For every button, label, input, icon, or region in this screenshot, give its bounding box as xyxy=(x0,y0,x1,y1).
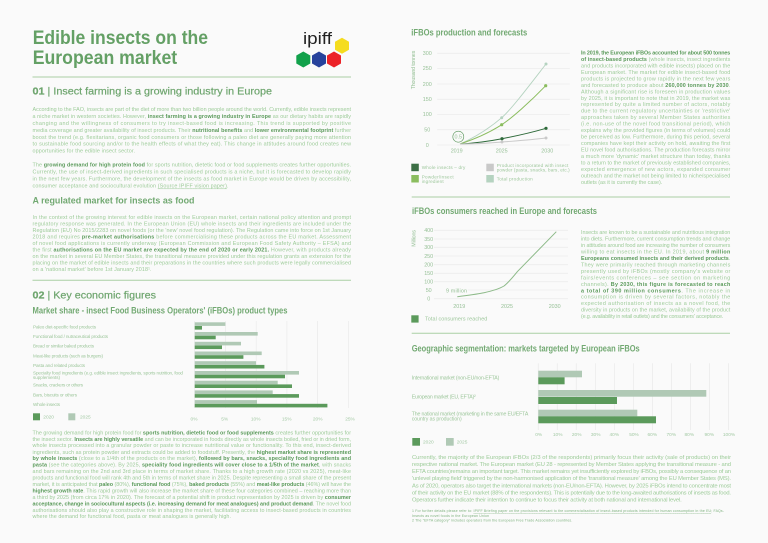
text block: product analysis: The growing demand for high protein food for sports nutrition, dietetic food or food supplements creates further opportunities for xyxy=(32,430,351,436)
text block: product analysis: by whole insects (close to a 1/4th of the products on the market), followed by bars, snacks, speciality food ingredients and xyxy=(32,456,351,462)
line chart: consumers reached: 300 xyxy=(424,245,433,251)
title: Edible insects on the xyxy=(33,28,208,49)
bar chart: product types: 5% xyxy=(221,417,229,423)
bar chart: geographic segmentation: 20% xyxy=(572,432,582,438)
text block: product analysis: authorisations should also play a constructive role in shaping the market, facilitating access to insect-based products in countries xyxy=(32,508,351,514)
text block: consumers analysis: a total of 390 million consumers. The increase in xyxy=(581,288,730,294)
line chart: production forecasts: 100 xyxy=(423,112,432,118)
text block: production analysis: outlets (as it is currently the case). xyxy=(581,180,662,186)
bar chart: geographic segmentation: 50% xyxy=(629,432,640,438)
text block: intro: a niche market in western societies. However, insect farming is a growing industry in Europe as our dietary habits are rapidly xyxy=(32,114,351,120)
line chart: consumers reached: 9 million xyxy=(446,288,467,294)
bar chart: geographic segmentation: 40% xyxy=(609,432,620,438)
text block: consumers analysis: into diets. Furthermore, current consumption trends and change xyxy=(581,237,730,243)
legend: consumers reached: Total consumers reached xyxy=(425,316,487,322)
text block: intro: changing and the willingness of consumers to try insect-based food is increasing. This trend is supported by positive xyxy=(32,121,351,127)
text block: protein demand: Currently, the use of insect-derived ingredients in such specialised products is a niche, but it is forecasted to develop rapidly xyxy=(32,170,351,176)
bar chart: product types: Whole insects xyxy=(33,402,61,407)
text block: regulation: placing on the market of edible insects and their preparations in the countries where such products were legally commercialised xyxy=(32,260,351,266)
line chart: consumers reached: 0 xyxy=(427,297,430,303)
bar chart: geographic segmentation: 100% xyxy=(723,432,736,438)
line chart: production forecasts: 0 xyxy=(426,143,429,149)
text block: protein demand: in the next few years. Furthermore, the development of the insects as food market in Europe would be driven by accessibility, xyxy=(32,177,352,183)
text block: production analysis: represented by quite a limited number of actors, notably xyxy=(581,102,731,108)
line chart: production forecasts: 0.5 xyxy=(455,135,462,141)
bar chart: product types: Pasta and related products xyxy=(33,363,86,368)
bar chart: product types: supplements) xyxy=(33,375,60,380)
text block: geographic analysis xyxy=(412,455,731,504)
text block: production analysis: approaches taken by several Member States authorities xyxy=(581,115,731,121)
text block: production analysis: companies have kept their activity on hold, awaiting the first xyxy=(581,141,731,147)
bar chart: geographic segmentation: 70% xyxy=(666,432,677,438)
line chart: consumers reached xyxy=(412,228,568,310)
bar chart: geographic segmentation: country as production) xyxy=(412,417,462,423)
bar chart: product types: Bread or similar baked products xyxy=(33,344,95,349)
text block: consumers analysis: consumption is driven by several factors, notably the xyxy=(581,295,730,301)
text block: protein demand: consumer acceptance and sociocultural evolution (Source IPIFF vision paper). xyxy=(32,184,228,190)
legend: product types: 2025 xyxy=(80,415,91,421)
text block: product analysis: market, it is anticipated that paleo (80%), functional food (75%), baked products (55%) and meat-like products (46%) will have the xyxy=(32,482,351,488)
text block: production analysis: by 2025, it is important to note that in 2019, the market was xyxy=(581,96,731,102)
bar chart: product types: Snacks, crackers or others xyxy=(33,383,84,388)
text block: intro: media coverage and greater availability of insect products. Their nutritional benefits and lower environmental footprint further xyxy=(32,128,351,134)
text block: geographic analysis: Operators further indicate their intention to continue to focus their activity at both national and international level. xyxy=(412,498,682,504)
line chart: consumers reached: 400 xyxy=(424,228,433,234)
line chart: consumers reached: 2025 xyxy=(501,304,513,310)
legend: geographic segmentation: 2025 xyxy=(457,440,468,446)
heading: market share: Market share - insect Food Business Operators' (iFBOs) product types xyxy=(32,305,288,315)
bar chart: geographic segmentation: 60% xyxy=(647,432,658,438)
logo: ipiff xyxy=(296,29,349,68)
footnotes xyxy=(412,509,725,522)
text block: product analysis xyxy=(32,430,352,520)
text block: product analysis: products and functional food will rank 4th and 5th in terms of market share in 2025. Despite representing a small share of the present xyxy=(32,476,352,482)
text block: regulation: 2018 and requires pre-market authorisations before commercialising these products across the EU market. Assessment xyxy=(32,234,351,240)
text block: regulation: of novel food applications is currently underway (European Commission and European Food Safety Authority – EFSA) and xyxy=(32,241,351,247)
text block: production analysis: to a return to the market of previously established companies, xyxy=(581,160,731,166)
text block: production analysis: of insect-based products (whole insects, insect ingredients xyxy=(581,57,731,63)
text block: product analysis: where the demand for functional food, pasta or meat analogues is generally high. xyxy=(32,514,231,520)
text block: production analysis: explains why the provided figures (in terms of volumes) could xyxy=(581,128,730,134)
text block: production analysis: outreach and the market not being limited to niche/specialised xyxy=(581,173,730,179)
line chart: production forecasts: Thousand tonnes xyxy=(411,50,417,89)
heading: section 01: 01 | Insect farming is a growing industry in Europe xyxy=(32,86,272,98)
footnotes: 1 For further details please refer to: IPIFF Briefing paper on the provisions relevant to the commercialisation of insect-based products intended for human consumption in the EU; FAQs- xyxy=(412,509,725,513)
legend: production forecasts: powder (pasta, snacks, bars, etc.) xyxy=(497,168,570,173)
text block: production analysis: EU novel food authorisations. The production forecasts mirror xyxy=(581,148,731,154)
text block: production analysis: expected emergence of new actors, expanded consumer xyxy=(581,167,731,173)
text block: production analysis: due to the current regulatory uncertainties or 'restrictive' xyxy=(581,109,730,115)
text block: product analysis: acceptance, change in sociocultural aspects (i.e. increasing demand for meat analogues) and product demand. The novel food xyxy=(32,502,351,508)
title: European market xyxy=(33,48,178,69)
legend: production forecasts: Product incorporated with insect xyxy=(497,163,569,168)
text block: production analysis: (i.e. non-use of the novel food transitional period), which xyxy=(581,122,730,128)
text block: geographic analysis: of their activity on the EU market (88% of the respondents). This is potentially due to the long-awaited authorisations of insects as food. xyxy=(412,491,731,497)
legend: production forecasts: ingredient xyxy=(422,179,444,184)
line chart: production forecasts: 2025 xyxy=(496,149,508,155)
text block: consumers analysis: (e.g. availability in retail outlets) and the consumers' acceptance. xyxy=(581,314,723,320)
footnotes: Insects as novel foods in the European Union xyxy=(412,514,489,518)
text block: product analysis: the insect sector. Insects are highly versatile and can be incorporated in foods directly as whole insects boiled, fried or in dried form, xyxy=(32,437,352,443)
text block: consumers analysis xyxy=(580,230,731,320)
text block: regulation: the first authorisations on the EU market are expected by the end of 2020 or early 2021. However, with products already xyxy=(32,247,351,253)
legend: production forecasts: Total production xyxy=(497,177,533,182)
line chart: production forecasts: 150 xyxy=(423,97,432,103)
bar chart: product types: Meat-like products (such as burgers) xyxy=(33,353,103,358)
text block: intro: According to the FAO, insects are part of the diet of more than two billion people around the world. Currently, edible insects represent xyxy=(32,107,352,113)
line chart: consumers reached: 150 xyxy=(424,271,433,277)
line chart: consumers reached: 2019 xyxy=(453,304,465,310)
text block: regulation: Regulation (EU) No 2015/2283 on novel foods (or the 'new' novel food regulation). The Regulation came into force on 1st January xyxy=(32,228,351,234)
text block: intro: opportunities for the edible insect sector. xyxy=(32,149,135,155)
heading: regulated market: A regulated market for insects as food xyxy=(32,196,194,206)
line chart: production forecasts: 200 xyxy=(423,82,432,88)
text block: consumers analysis: in attitudes around food are increasing the number of consumers xyxy=(581,243,731,249)
line chart: production forecasts xyxy=(411,50,570,155)
bar chart: product types: Functional food / nutraceutical products xyxy=(33,334,109,339)
logo: ipiff: ipiff xyxy=(303,29,332,48)
bar chart: geographic segmentation: 30% xyxy=(591,432,601,438)
bar chart: geographic segmentation: 0% xyxy=(535,432,543,438)
text block: regulation xyxy=(32,215,351,273)
text block: product analysis: and bars remaining on the 2nd and 3rd place in terms of market share. Thanks to a high growth rate (2020 vs 2025), meat-like xyxy=(32,469,351,475)
legend: product types: 2020 xyxy=(43,415,54,421)
line chart: production forecasts: 50 xyxy=(424,128,430,134)
text block: product analysis: whole insects processed into a granular powder or paste to increase nutritional value or functionality. To this end, insect-derived xyxy=(32,443,351,449)
bar chart: product types xyxy=(33,321,356,423)
line chart: production forecasts: 2019 xyxy=(451,149,463,155)
bar chart: product types: 15% xyxy=(282,417,292,423)
legend: product types xyxy=(33,413,91,421)
bar chart: product types: 20% xyxy=(313,417,323,423)
text block: geographic analysis: 'unlevel playing field' triggered by the non-harmonised application of the 'transitional measure' among the EU Member States (MS). xyxy=(412,476,731,482)
text block: production analysis: products is projected to grow rapidly in the next few years xyxy=(581,76,731,82)
bar chart: geographic segmentation: 90% xyxy=(704,432,715,438)
legend: production forecasts xyxy=(411,163,570,184)
line chart: consumers reached: 350 xyxy=(424,237,433,243)
text block: production analysis: and forecasted to produce about 260,000 tonnes by 2030. xyxy=(581,83,730,89)
heading: geographic segmentation: Geographic segmentation: markets targeted by European iFBOs xyxy=(412,343,640,353)
line chart: production forecasts: 300 xyxy=(423,51,432,57)
bar chart: product types: Specialty food ingredients (e.g. edible insect ingredients, sports nutrition, food xyxy=(33,371,183,376)
legend: geographic segmentation xyxy=(412,438,468,446)
title xyxy=(33,28,208,69)
text block: product analysis: pasta (see the categories above). By 2025, speciality food ingredients will cover close to a 1/5th of the market, with snacks xyxy=(32,462,351,468)
line chart: consumers reached: 2030 xyxy=(549,304,561,310)
bar chart: product types: 0% xyxy=(191,417,198,423)
text block: product analysis: highest growth rate. This rapid growth will also increase the market share of these four categories combined – reaching more than xyxy=(32,488,351,494)
bar chart: product types: Bars, biscuits or others xyxy=(33,392,78,397)
text block: consumers analysis: Insects are known to be a sustainable and nutritious integration xyxy=(581,230,730,236)
text block: production analysis: In 2019, the European iFBOs accounted for about 500 tonnes xyxy=(581,50,730,56)
line chart: consumers reached: 250 xyxy=(424,254,433,260)
text block: production analysis: be perceived as low. Furthermore, during this period, several xyxy=(581,135,730,141)
bar chart: product types: Paleo diet-specific food products xyxy=(33,324,97,329)
text block: consumers analysis: Europeans consumed insects and their derived products. xyxy=(581,256,730,262)
line chart: consumers reached: 50 xyxy=(426,288,432,294)
text block: regulation: In the context of the growing interest for edible insects on the European market, certain national policy attention and prompt xyxy=(32,215,351,221)
text block: consumers analysis: channels). By 2030, this figure is forecasted to reach xyxy=(581,282,730,288)
bar chart: geographic segmentation: 10% xyxy=(553,432,563,438)
bar chart: geographic segmentation xyxy=(412,363,736,438)
text block: geographic analysis: Currently, the majority of the European iFBOs (2/3 of the respondents) primarily focus their activity (sale of products) on their xyxy=(412,455,731,461)
footnotes: 2 The "EFTA category" includes operators from the European Free Trade Association countries. xyxy=(412,518,572,522)
legend: production forecasts: Powder/insect xyxy=(422,174,454,179)
heading: production forecasts: iFBOs production and forecasts xyxy=(411,28,527,38)
heading: consumers reached: iFBOs consumers reached in Europe and forecasts xyxy=(412,206,597,216)
text block: intro: boost the trend (e.g. flexitarians, organic food consumers or those following a paleo diet are generally paying more attention xyxy=(32,135,351,141)
heading: section 02: 02 | Key economic figures xyxy=(32,289,156,301)
line chart: production forecasts: 2030 xyxy=(541,149,553,155)
bar chart: geographic segmentation: European market (EU, EFTA)² xyxy=(412,395,476,401)
text block: production analysis: and products incorporated with edible insects) placed on the xyxy=(581,63,730,69)
text block: regulation: regulatory response was generated. In the European Union (EU) whole insects and their ingredients are included under the xyxy=(32,222,351,228)
text block: production analysis: European market. The market for edible insect-based food xyxy=(581,70,730,76)
text block: consumers analysis: expected authorisation of insects as a novel food, the xyxy=(581,301,730,307)
text block: protein demand: The growing demand for high protein food for sports nutrition, dietetic food or food supplements creates further opportunities. xyxy=(32,163,351,169)
text block: consumers analysis: willing to eat insects in the EU. In 2019, about 9 million xyxy=(580,250,730,256)
text block: consumers analysis: fairs/events conferences – see section on marketing xyxy=(581,275,730,281)
text block: consumers analysis: presently used by iFBOs (mostly company's website or xyxy=(581,269,731,275)
text block: product analysis: a third by 2025 (from circa 17% in 2020). The forecast of a potential shift in product representation by 2025 is driven by consumer xyxy=(32,495,352,501)
line chart: consumers reached: 200 xyxy=(424,263,433,269)
text block: production analysis: Although a significant rise is foreseen in production values xyxy=(581,89,731,95)
bar chart: geographic segmentation: International market (non-EU/non-EFTA) xyxy=(412,375,500,381)
legend: production forecasts: Whole insects – dry xyxy=(422,165,466,170)
text block: consumers analysis: diversity in products on the market, availability of the product xyxy=(581,308,731,314)
line chart: production forecasts: 250 xyxy=(423,66,432,72)
text block: protein demand xyxy=(32,163,352,190)
bar chart: product types: 25% xyxy=(345,417,356,423)
bar chart: geographic segmentation: The national market (marketing in the same EU/EFTA xyxy=(412,411,529,417)
bar chart: product types: 10% xyxy=(251,417,261,423)
line chart: consumers reached: 100 xyxy=(424,280,433,286)
line chart: consumers reached: Millions xyxy=(412,230,418,247)
text block: production analysis: a much more 'dynamic' market structure than today, thanks xyxy=(581,154,731,160)
text block: production analysis xyxy=(581,50,731,186)
text block: product analysis: ingredients, such as protein powder and extracts could be added to foodstuff. Presently, the highest market share is represented xyxy=(32,450,351,456)
legend: consumers reached xyxy=(411,315,487,323)
text block: geographic analysis: EFTA countries)remains an important target. This market remains yet insufficiently explored by iFBOs, possibly a consequence of an xyxy=(412,469,731,475)
text block: geographic analysis: respective national market. The European market (EU 28 - represented by Member States applying the transitional measure - and xyxy=(412,462,731,468)
legend: geographic segmentation: 2020 xyxy=(423,440,434,446)
text block: consumers analysis: They were primarily reached through marketing channels xyxy=(581,262,731,268)
text block: regulation: on a 'national market' before 1st January 2018¹. xyxy=(32,267,152,273)
text block: intro: to sustainable food sourcing and/or to the health effects of what they eat). This change in attitudes around food creates new xyxy=(32,142,351,148)
text block: geographic analysis: As of 2020, operators also target the international markets (non-EU/non-EFTA). However, by 2025 iFBOs intend to concentrate most xyxy=(412,483,731,489)
text block: regulation: on the market in several EU Member States, the transitional measure provided under this regulation grants an extension for the xyxy=(32,254,351,260)
text block: intro xyxy=(32,107,352,155)
bar chart: geographic segmentation: 80% xyxy=(684,432,695,438)
